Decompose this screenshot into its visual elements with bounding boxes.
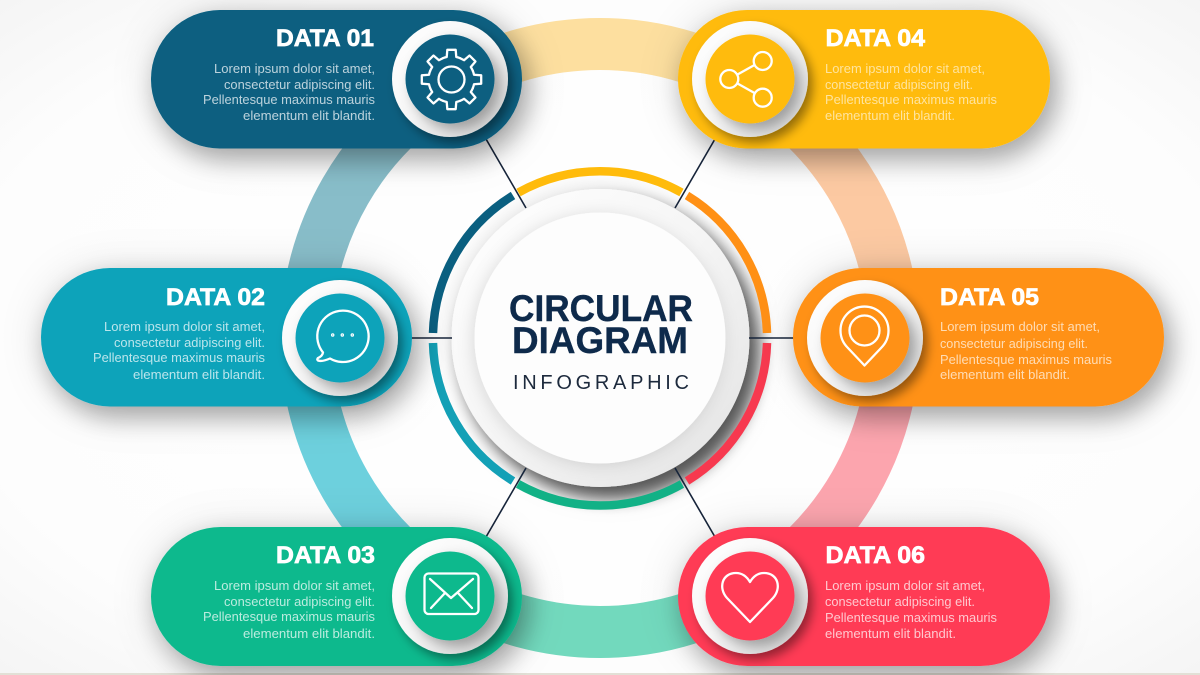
text block: data 04: Pellentesque maximus mauris (825, 92, 997, 107)
text block: data 06 (825, 578, 997, 641)
icon: envelope (424, 574, 478, 614)
text block: data 03: consectetur adipiscing elit. (224, 594, 375, 609)
icon: chat bubble (317, 311, 369, 362)
inner segmented ring (433, 171, 767, 506)
text block: data 04: Lorem ipsum dolor sit amet, (825, 61, 985, 76)
text block: data 02 (93, 319, 265, 382)
heading: data 06: DATA 06 (826, 542, 925, 569)
center title (509, 288, 693, 394)
text block: data 02: Pellentesque maximus mauris (93, 350, 265, 365)
text block: data 01 (203, 61, 375, 123)
text block: data 01: Lorem ipsum dolor sit amet, (214, 61, 375, 76)
outer ring (306, 44, 894, 632)
text block: data 05: elementum elit blandit. (940, 367, 1070, 382)
text block: data 02: consectetur adipiscing elit. (114, 335, 265, 350)
text block: data 06: consectetur adipiscing elit. (825, 594, 975, 609)
icon: heart (722, 573, 778, 622)
text block: data 04 (825, 61, 997, 123)
text block: data 03: Pellentesque maximus mauris (203, 609, 375, 624)
text block: data 03 (203, 578, 375, 641)
text block: data 05: Lorem ipsum dolor sit amet, (940, 319, 1100, 334)
icon: location pin (841, 307, 889, 366)
text block: data 06: Lorem ipsum dolor sit amet, (825, 578, 985, 593)
connector lines (405, 139, 800, 537)
text block: data 01: Pellentesque maximus mauris (203, 92, 375, 107)
center title: DIAGRAM (512, 320, 688, 361)
icon: gear (422, 50, 481, 109)
text block: data 05 (940, 319, 1112, 382)
text block: data 04: consectetur adipiscing elit. (825, 77, 973, 92)
text block: data 03: Lorem ipsum dolor sit amet, (214, 578, 375, 593)
panel: data 05 (793, 268, 1164, 406)
heading: data 02: DATA 02 (166, 284, 265, 311)
text block: data 02: elementum elit blandit. (133, 367, 265, 382)
text block: data 06: Pellentesque maximus mauris (825, 610, 997, 625)
panel: data 01 (151, 10, 522, 148)
text block: data 03: elementum elit blandit. (243, 626, 375, 641)
heading: data 04: DATA 04 (826, 25, 926, 52)
text block: data 05: consectetur adipiscing elit. (940, 336, 1088, 351)
center title: INFOGRAPHIC (513, 372, 689, 394)
center disc (452, 189, 750, 487)
heading: data 03: DATA 03 (276, 542, 375, 569)
text block: data 01: elementum elit blandit. (243, 108, 375, 123)
heading: data 01: DATA 01 (276, 25, 374, 52)
panel: data 06 (678, 527, 1050, 666)
center title: CIRCULAR (509, 288, 693, 329)
panel: data 03 (151, 527, 522, 666)
icon: share (720, 52, 772, 107)
text block: data 06: elementum elit blandit. (825, 626, 956, 641)
text block: data 05: Pellentesque maximus mauris (940, 352, 1112, 367)
text block: data 02: Lorem ipsum dolor sit amet, (104, 319, 265, 334)
panel: data 02 (41, 268, 412, 406)
text block: data 01: consectetur adipiscing elit. (224, 77, 375, 92)
heading: data 05: DATA 05 (940, 284, 1039, 311)
panel: data 04 (678, 10, 1050, 148)
text block: data 04: elementum elit blandit. (825, 108, 955, 123)
